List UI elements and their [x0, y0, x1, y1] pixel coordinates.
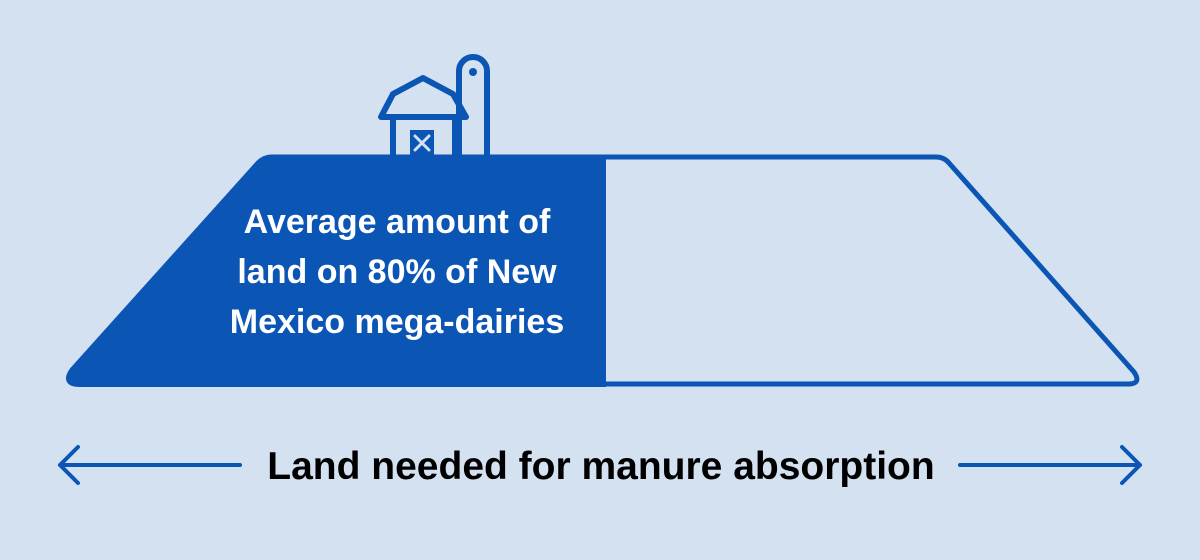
arrow: right	[960, 447, 1140, 483]
text block: dairy land label: Mexico mega-dairies	[230, 303, 564, 341]
text block: dairy land label: land on 80% of New	[237, 253, 557, 291]
panel: dairy land filled	[67, 155, 606, 387]
arrow: left	[60, 447, 240, 483]
icon: barn and silo	[381, 57, 487, 156]
text block: dairy land label: Average amount of	[244, 203, 551, 241]
panel: land outline	[68, 157, 1137, 384]
heading: land needed label: Land needed for manure absorption	[267, 445, 935, 488]
